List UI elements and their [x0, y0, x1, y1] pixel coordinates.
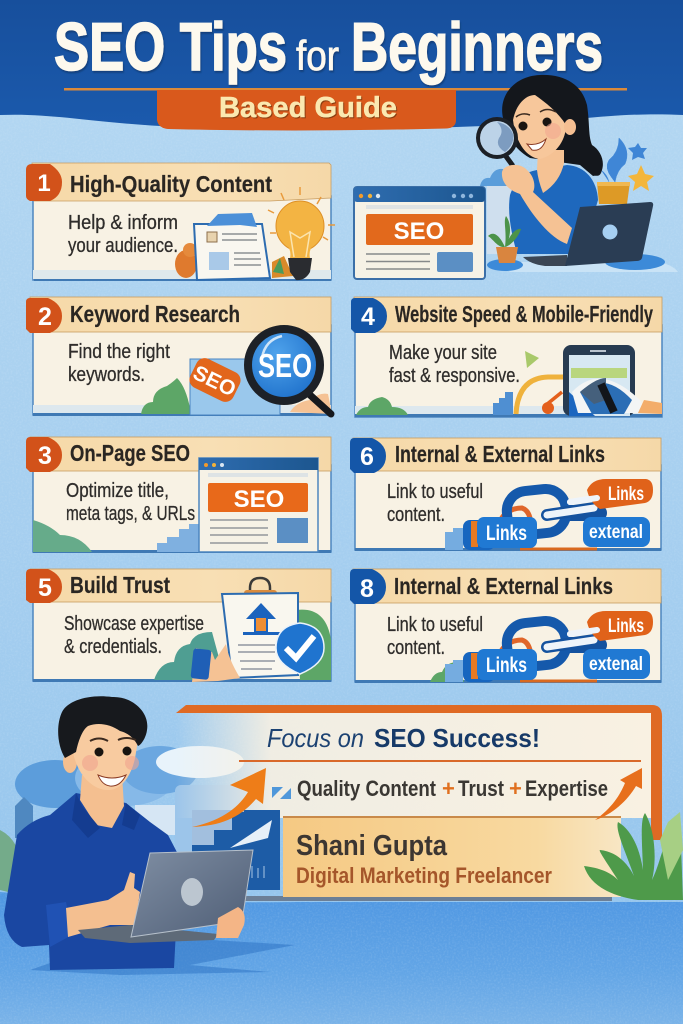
- icon: play triangle: [525, 351, 539, 368]
- arrow: left: [192, 768, 266, 827]
- body text: [66, 480, 195, 525]
- shirt: [4, 793, 180, 970]
- scenery behind presenter: [0, 746, 245, 892]
- heading: Focus on: [267, 723, 364, 753]
- face: [513, 95, 566, 159]
- arrow: right: [595, 768, 642, 820]
- body text: [64, 613, 204, 658]
- magnifier: [476, 117, 518, 166]
- divider: [239, 760, 641, 762]
- collar: [72, 793, 140, 838]
- ribbon: Based Guide: [157, 90, 456, 130]
- icon: blue card: [190, 359, 280, 415]
- title rule: [64, 88, 627, 90]
- panel 5: Build Trust: [26, 569, 331, 682]
- browser window illustration: [354, 187, 485, 279]
- neck: [80, 775, 124, 828]
- icon: chart panel: [192, 810, 280, 890]
- number badge: [26, 569, 62, 603]
- body text: Optimize title,: [66, 480, 169, 502]
- subheading: Quality Content: [297, 776, 437, 801]
- subheading: Expertise: [525, 776, 608, 801]
- icon: foliage: [154, 632, 225, 680]
- cream panel: [176, 713, 651, 818]
- top blue banner: [0, 0, 683, 130]
- subheading: +: [442, 776, 455, 801]
- icon: small gauge: [493, 377, 566, 415]
- neck: [537, 150, 564, 193]
- heading: On-Page SEO: [70, 440, 190, 466]
- title: for: [296, 32, 339, 79]
- ground shadow: [30, 935, 295, 975]
- icon: documents: [175, 213, 270, 280]
- icon: chain with link tags: Links: [608, 616, 644, 637]
- icon: check badge: [276, 623, 324, 674]
- arm and hand: [66, 872, 140, 937]
- title: Beginners: [351, 9, 603, 85]
- heading: Internal & External Links: [395, 441, 605, 467]
- panel header: [30, 297, 331, 332]
- icon: chain with link tags: Links: [486, 522, 527, 545]
- icon: phone: [563, 345, 662, 416]
- icon: magnifier: SEO: [258, 347, 312, 384]
- name: Shani Gupta: [296, 830, 448, 862]
- icon: browser window: [199, 458, 318, 552]
- icon: chain with link tags: Links: [608, 484, 644, 505]
- heading: High-Quality Content: [70, 171, 272, 197]
- illustration: woman with magnifier and laptop: [476, 75, 678, 272]
- heading: Build Trust: [70, 572, 170, 598]
- panel header: [30, 569, 331, 602]
- number badge: [350, 569, 386, 604]
- icon: plants: [141, 378, 191, 414]
- body text: Find the right: [68, 341, 170, 363]
- sleeve cuff: [46, 902, 72, 947]
- body text: keywords.: [68, 364, 145, 386]
- icon: chain with link tags: [445, 479, 653, 550]
- panel 5: Build Trust: 5: [38, 574, 52, 602]
- title: [54, 9, 603, 85]
- number badge: [350, 438, 386, 473]
- callout: Focus on SEO Success: SEO Success!: [374, 723, 540, 753]
- body text: [68, 212, 178, 257]
- icon: plant: [584, 812, 683, 900]
- hair: [58, 696, 147, 758]
- body text: Make your site: [389, 342, 497, 364]
- body text: Link to useful: [387, 481, 483, 503]
- panel header: [354, 297, 662, 332]
- illustration: presenter with laptop: [4, 696, 295, 975]
- panel 1: High-Quality Content: [26, 163, 335, 281]
- panel header: [30, 437, 331, 471]
- icon: chain with link tags: Links: [486, 654, 527, 677]
- name plate: [283, 817, 621, 897]
- icon: hand: [192, 644, 240, 682]
- panel header: [353, 438, 661, 471]
- subheading: [297, 776, 608, 801]
- panel 8: Internal and External Links: [350, 569, 661, 683]
- body text: content.: [387, 637, 445, 659]
- body text: your audience.: [68, 235, 178, 257]
- small diamond marks: [272, 787, 291, 799]
- icon: chain with link tags: extenal: [589, 522, 643, 543]
- orange frame: [176, 705, 662, 840]
- laptop: [78, 850, 253, 943]
- panel 2: Keyword Research: 2: [38, 303, 52, 331]
- role: Digital Marketing Freelancer: [296, 863, 552, 888]
- number badge: [26, 437, 62, 472]
- panel 4: Website Speed and Mobile-Friendly: [351, 297, 662, 417]
- icon: chain with link tags: extenal: [589, 654, 643, 675]
- body text: [387, 481, 483, 526]
- icon: leaves: [430, 662, 464, 682]
- icon: browser window: SEO: [234, 486, 284, 513]
- eyes: [94, 748, 104, 756]
- shirt: [509, 165, 598, 254]
- body text: meta tags, & URLs: [66, 503, 195, 525]
- heading: Internal & External Links: [394, 573, 613, 599]
- body text: [387, 614, 483, 659]
- panel 6: Internal and External Links: [350, 438, 661, 551]
- icon: bars: [157, 524, 199, 552]
- callout: Focus on SEO Success: [176, 705, 683, 901]
- cheeks: [82, 755, 98, 771]
- right hand: [216, 907, 245, 938]
- face: [72, 715, 137, 790]
- icon: decorative plant and stars: [480, 138, 678, 272]
- icon: plant in pot: [487, 216, 523, 271]
- number badge: [26, 298, 62, 333]
- subheading: +: [509, 776, 522, 801]
- icon: light bulb: [268, 187, 335, 280]
- panel 2: Keyword Research: [26, 297, 332, 416]
- body text: fast & responsive.: [389, 365, 520, 387]
- heading: Keyword Research: [70, 301, 240, 327]
- laptop: [523, 202, 653, 266]
- body text: Showcase expertise: [64, 613, 204, 635]
- ribbon: Based Guide: Based Guide: [219, 92, 397, 124]
- body text: content.: [387, 504, 445, 526]
- body text: Help & inform: [68, 212, 178, 234]
- panel 8: Internal and External Links: 8: [360, 575, 374, 603]
- icon: clipboard: [222, 578, 298, 678]
- icon: chain with link tags: [445, 611, 653, 682]
- subheading: Trust: [458, 776, 505, 801]
- panel 1: High-Quality Content: 1: [37, 170, 51, 197]
- number badge: [26, 164, 62, 201]
- panel 3: On-Page SEO: 3: [38, 442, 52, 470]
- panel header: [353, 569, 661, 603]
- icon: shrubs: [356, 397, 408, 415]
- ear: [63, 751, 77, 773]
- panel 6: Internal and External Links: 6: [360, 443, 374, 471]
- hair: [502, 75, 603, 176]
- icon: magnifier: [248, 329, 331, 414]
- panel 4: Website Speed and Mobile-Friendly: 4: [361, 303, 375, 331]
- icon: leaves: [33, 520, 92, 552]
- number badge: [351, 298, 387, 333]
- panel header: [32, 163, 331, 201]
- body text: [389, 342, 520, 387]
- body text: [68, 341, 170, 386]
- icon: hand: [290, 394, 332, 414]
- icon: orange SEO tag: SEO: [189, 361, 239, 401]
- browser window illustration: SEO: [394, 218, 444, 245]
- SEO button: [366, 214, 473, 245]
- body text: Link to useful: [387, 614, 483, 636]
- hand and arm: [502, 165, 572, 244]
- body text: & credentials.: [64, 636, 162, 658]
- window title bar: [354, 187, 485, 202]
- title: SEO Tips: [54, 9, 287, 85]
- bottom shadow: [242, 896, 612, 901]
- panel 3: On-Page SEO: [26, 437, 331, 553]
- smile: [98, 775, 126, 786]
